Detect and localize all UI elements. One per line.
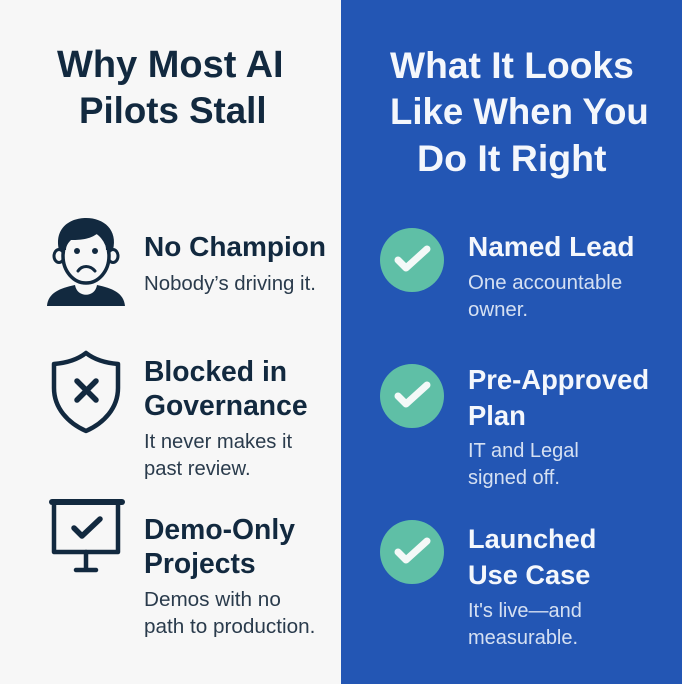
heading: blocked in governance: Blocked in — [144, 355, 287, 387]
text: IT and legal signed off: IT and Legal — [468, 440, 579, 462]
text: never makes it past review: It never makes it — [144, 431, 292, 453]
text: never makes it past review — [144, 431, 292, 480]
heading: blocked in governance — [144, 355, 308, 421]
text: one accountable owner: One accountable — [468, 272, 622, 294]
heading: launched use case: Use Case — [468, 559, 590, 590]
text: demos with no path: Demos with no — [144, 588, 281, 611]
heading: launched use case: Launched — [468, 523, 596, 554]
heading: what it looks like: What It Looks — [390, 44, 634, 86]
panel: right blue background — [341, 0, 682, 684]
text: nobody's driving it: Nobody’s driving it. — [144, 273, 316, 295]
heading: why most AI pilots stall: Pilots Stall — [79, 90, 267, 131]
text: IT and legal signed off — [468, 440, 579, 489]
heading: demo-only projects — [144, 513, 295, 579]
text: live and measurable — [468, 600, 582, 649]
heading: pre-approved plan — [468, 364, 649, 431]
heading: launched use case — [468, 523, 596, 590]
text: IT and legal signed off: signed off. — [468, 467, 560, 489]
heading: blocked in governance: Governance — [144, 389, 308, 421]
heading: no champion: No Champion — [144, 231, 326, 262]
text: demos with no path: path to production. — [144, 615, 315, 638]
heading: demo-only projects: Projects — [144, 547, 256, 579]
heading: why most AI pilots stall: Why Most AI — [57, 44, 284, 86]
text: demos with no path — [144, 588, 315, 638]
icon: presentation screen with check — [49, 499, 125, 572]
heading: demo-only projects: Demo-Only — [144, 513, 295, 545]
text: live and measurable: It's live—and — [468, 600, 582, 622]
heading: named lead: Named Lead — [468, 231, 634, 262]
heading: what it looks like — [390, 44, 649, 179]
icon: sad person — [47, 218, 125, 306]
heading: pre-approved plan: Plan — [468, 400, 526, 431]
heading: why most AI pilots stall — [57, 44, 284, 131]
text: one accountable owner: owner. — [468, 299, 528, 321]
icon: shield with x — [52, 350, 120, 434]
text: one accountable owner — [468, 272, 622, 321]
text: live and measurable: measurable. — [468, 627, 578, 649]
heading: what it looks like: Do It Right — [417, 137, 607, 179]
heading: what it looks like: Like When You — [390, 90, 649, 132]
text: never makes it past review: past review. — [144, 458, 251, 480]
heading: pre-approved plan: Pre-Approved — [468, 364, 649, 395]
